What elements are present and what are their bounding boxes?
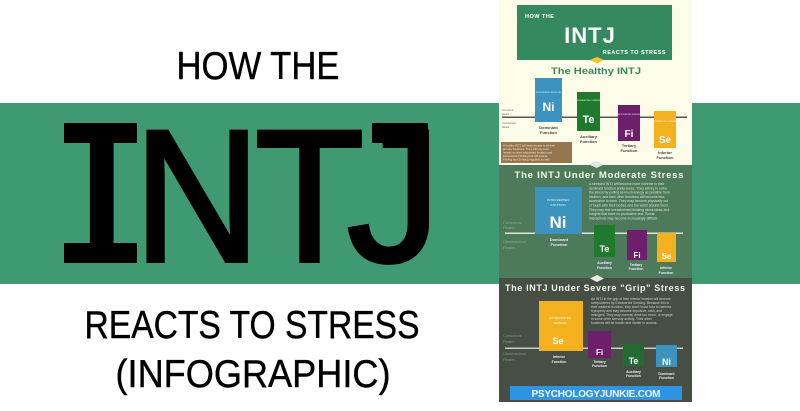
card: Ni: Function xyxy=(659,376,674,380)
healthy heading: The Healthy INTJ xyxy=(551,66,641,76)
realm labels xyxy=(502,109,517,129)
realm labels: Realm xyxy=(502,113,509,116)
realm labels xyxy=(503,220,526,250)
card: Te: Auxiliary xyxy=(580,134,598,139)
description: dominant function preferences. They will try to solve xyxy=(589,186,667,190)
card: Te: Auxiliary xyxy=(597,261,612,265)
card: Ni: INTROVERTED xyxy=(547,198,570,202)
card: Te xyxy=(594,225,615,270)
card: Fi: INTROVERTED FEELING xyxy=(617,114,641,116)
card: Ni xyxy=(656,345,677,380)
website banner xyxy=(510,386,682,400)
description xyxy=(589,182,670,220)
header banner: REACTS TO STRESS xyxy=(603,50,666,56)
header banner: HOW THE xyxy=(525,14,554,20)
callout: healthy description: primary functions. They will rely most xyxy=(503,147,549,151)
heading: INTJ: J xyxy=(347,91,441,301)
card: Se: Inferior xyxy=(660,266,673,270)
card: Fi xyxy=(617,105,641,153)
description: intuition, and their other functions will become less xyxy=(589,195,665,199)
description: their weakest function, they won't know how to harness xyxy=(591,305,672,309)
panel: healthy xyxy=(499,0,692,165)
card: Ni: Ni xyxy=(542,100,554,114)
realm labels: Realm xyxy=(503,339,515,344)
description: the stress by pulling as much energy as possible from xyxy=(589,191,670,195)
realm labels: Conscious xyxy=(503,220,522,225)
callout: healthy description: A healthy INTJ will have access to all their xyxy=(503,144,555,148)
heading: INTJ: N xyxy=(134,92,260,301)
header banner: INTJ xyxy=(564,23,616,48)
icon: diamond xyxy=(589,161,604,168)
callout: healthy description: Feeling and Sensing regularly as well. xyxy=(503,158,550,162)
callout: healthy description: Extraverted Thinking but will access xyxy=(503,154,548,158)
header banner xyxy=(517,5,672,60)
description xyxy=(591,297,673,325)
callout: healthy description xyxy=(501,142,572,163)
card: Te: EXTRAVERTED THINKING xyxy=(576,99,601,102)
heading: how the: HOW THE xyxy=(176,45,340,88)
card: Fi: Fi xyxy=(625,129,634,140)
card: Ni: Function xyxy=(540,130,557,135)
card: Ni: INTUITION xyxy=(550,203,566,207)
card: Te xyxy=(576,92,601,144)
panel: severe stress xyxy=(499,275,692,402)
card: Se: Se xyxy=(659,135,672,146)
card: Te xyxy=(623,344,644,378)
card: Se: SENSING xyxy=(553,321,567,325)
description: in some other sensory activity. Their other xyxy=(591,317,653,321)
axis line xyxy=(505,232,683,234)
card: Ni: INTROVERTED INTUITION xyxy=(536,92,561,94)
heading: INTJ: I xyxy=(73,91,130,301)
card: Se: Se xyxy=(552,336,564,346)
realm labels: Unconscious xyxy=(503,351,526,356)
green band xyxy=(0,103,800,284)
realm labels: Realm xyxy=(503,225,515,230)
card: Se: Inferior xyxy=(553,355,566,359)
card: Fi: Function xyxy=(621,148,638,153)
website banner: PSYCHOLOGYJUNKIE.COM xyxy=(532,389,660,400)
card: Te: Te xyxy=(582,114,595,126)
axis line xyxy=(505,348,683,349)
callout: healthy description: heavily on their Introverted Intuition and xyxy=(503,150,552,154)
heading: INTJ: T xyxy=(255,91,364,301)
card: Fi: Fi xyxy=(596,348,603,357)
heading: infographic: (INFOGRAPHIC) xyxy=(116,353,390,396)
description: An INTJ in the grip of their inferior function will become xyxy=(591,297,671,301)
icon: yellow diamond xyxy=(590,57,604,64)
card: Ni xyxy=(535,78,562,135)
card: Ni: Ni xyxy=(662,357,671,367)
infographic thumbnail xyxy=(499,0,692,402)
moderate heading: The INTJ Under Moderate Stress xyxy=(514,170,684,181)
heading: INTJ xyxy=(64,91,441,301)
card: Se: Function xyxy=(552,360,566,364)
card: Se: Function xyxy=(657,155,674,160)
description: of touch with their bodies and the world around them. xyxy=(589,204,669,208)
card: Fi: Function xyxy=(629,267,643,271)
description: it properly and may become impulsive, rash, and xyxy=(591,309,662,313)
realm labels: Realm xyxy=(503,357,515,362)
realm labels: Realm xyxy=(502,126,509,129)
description: They may feel overwhelmed thinking about ideas and xyxy=(589,208,669,212)
card: Te: Te xyxy=(629,356,638,366)
card: Se: Se xyxy=(662,252,672,261)
card: Ni: Dominant xyxy=(539,125,558,130)
axis line xyxy=(502,116,687,118)
realm labels xyxy=(503,333,526,362)
description: A stressed INTJ will become more extreme in their xyxy=(589,182,665,186)
panel: moderate stress xyxy=(499,161,692,278)
card: Fi: Fi xyxy=(633,251,641,260)
realm labels: Conscious xyxy=(502,109,514,112)
realm labels: Conscious xyxy=(503,333,522,338)
card: Se: Function xyxy=(659,271,673,275)
card: Se xyxy=(653,111,678,160)
description: indulgent. They may overeat, drink too much, or engage xyxy=(591,313,673,317)
icon: diamond xyxy=(590,275,604,282)
realm labels: Unconscious xyxy=(502,122,517,125)
card: Se: Inferior xyxy=(658,150,672,155)
heading: reacts to stress: REACTS TO STRESS xyxy=(84,304,420,347)
card: Fi: Function xyxy=(592,364,607,368)
card: Fi xyxy=(627,230,647,271)
card: Fi: Tertiary xyxy=(593,360,606,364)
card: Te: Function xyxy=(597,266,612,270)
card: Se xyxy=(657,233,676,275)
description: functions will be harder and harder to access. xyxy=(591,321,657,325)
card: Te: Function xyxy=(580,139,597,144)
severe heading: The INTJ Under Severe "Grip" Stress xyxy=(505,283,685,293)
card: Fi xyxy=(588,331,611,368)
card: Te: Te xyxy=(600,244,609,254)
card: Ni: Dominant xyxy=(550,237,569,242)
card: Ni xyxy=(535,187,582,247)
description: overpowered by Extraverted Sensing. Because this is xyxy=(591,301,669,305)
description: accessible to them. They may become physically out xyxy=(589,199,668,203)
card: Ni: Dominant xyxy=(658,372,675,376)
card: Fi: Tertiary xyxy=(622,143,637,148)
card: Fi: Tertiary xyxy=(630,263,642,267)
card: Se: EXTRAVERTED SENSING xyxy=(653,120,678,123)
card: Se xyxy=(539,301,583,364)
card: Ni: Ni xyxy=(550,213,566,232)
card: Ni: Function xyxy=(551,242,568,247)
realm labels: Realm xyxy=(503,245,515,250)
card: Te: Auxiliary xyxy=(626,370,641,374)
description: interactions may become increasingly difficult. xyxy=(589,216,658,220)
realm labels: Unconscious xyxy=(503,239,526,244)
description: insights that have no productive end. Social xyxy=(589,212,655,216)
card: Se: EXTRAVERTED xyxy=(549,316,572,320)
card: Te: Function xyxy=(626,374,641,378)
